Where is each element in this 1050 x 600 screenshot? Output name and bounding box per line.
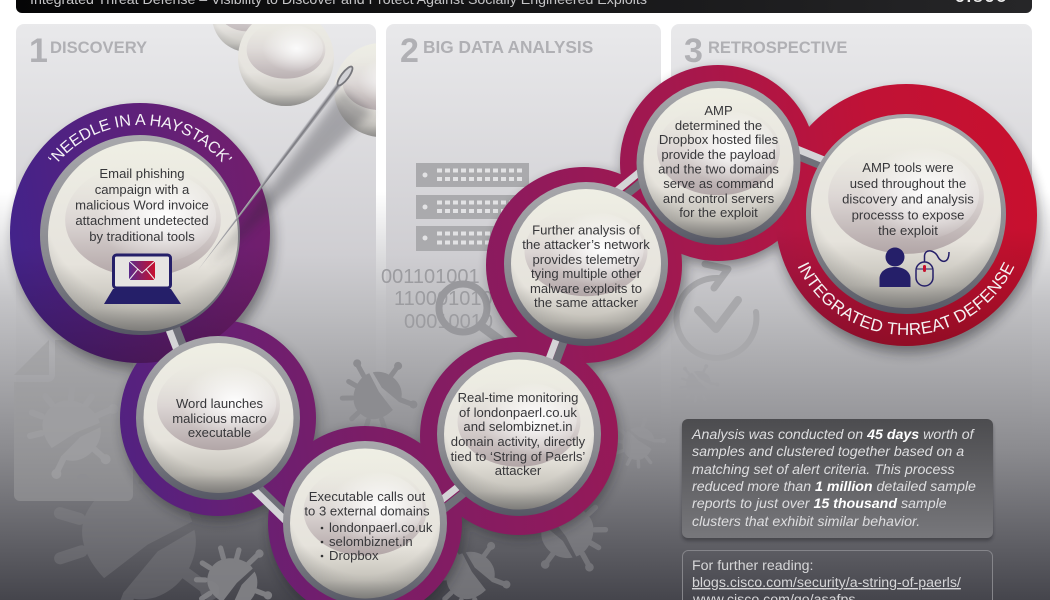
text: processs to expose bbox=[852, 208, 964, 222]
header bar bbox=[16, 0, 1032, 13]
heading: discovery: 1 bbox=[29, 32, 48, 70]
text: attachment undetected bbox=[75, 213, 209, 228]
step 6: amp determined bbox=[636, 81, 800, 245]
heading: retrospective bbox=[684, 32, 847, 70]
text: Executable calls out bbox=[309, 489, 426, 504]
callout text: reduced more than 1 million detailed sample bbox=[692, 479, 976, 495]
text: the same attacker bbox=[534, 295, 639, 310]
icon: document bbox=[14, 340, 133, 501]
icon: needle bbox=[198, 65, 372, 270]
text: Further analysis of bbox=[532, 222, 640, 238]
text: to 3 external domains bbox=[304, 504, 430, 518]
text: tying multiple other bbox=[531, 266, 642, 281]
binary digits: 00010010 bbox=[404, 311, 493, 333]
text: the attacker’s network bbox=[522, 237, 650, 252]
text: and selombiznet.in bbox=[463, 419, 573, 434]
binary digits: 001101001 bbox=[381, 266, 480, 288]
connectors between pearls bbox=[166, 147, 825, 528]
step 1: needle in a haystack bbox=[40, 114, 240, 335]
callout text: clusters that exhibit similar behavior. bbox=[692, 514, 920, 530]
analysis callout bbox=[682, 419, 993, 541]
text: and control servers bbox=[663, 191, 775, 206]
text: domain activity, directly bbox=[451, 434, 586, 449]
text bbox=[658, 103, 779, 220]
text bbox=[451, 390, 586, 478]
icon: laptop with envelope bbox=[104, 255, 181, 304]
text: Email phishing bbox=[99, 166, 185, 181]
heading: discovery bbox=[29, 32, 147, 70]
arc label bbox=[786, 215, 1026, 335]
text: and the two domains bbox=[658, 162, 779, 176]
text bbox=[842, 160, 974, 238]
text: tied to ‘String of Paerls’ bbox=[451, 449, 585, 464]
binary digits bbox=[381, 266, 515, 333]
text: discovery and analysis bbox=[842, 192, 974, 206]
heading: discovery: DISCOVERY bbox=[50, 38, 147, 57]
icon: server rack bbox=[416, 163, 529, 251]
icons: background bugs bbox=[8, 342, 725, 600]
step 7: integrated threat defense: INTEGRATED THREAT DEFENSE bbox=[798, 262, 1014, 335]
panel: retrospective bbox=[671, 24, 1032, 600]
text: AMP tools were bbox=[862, 160, 954, 175]
callout text: matching set of alert criteria. This process bbox=[692, 462, 955, 478]
panel: discovery bbox=[16, 24, 376, 282]
icon: refresh check bbox=[676, 264, 756, 358]
text: attacker bbox=[495, 463, 542, 478]
text: Word launches bbox=[176, 396, 263, 411]
text: provide the payload bbox=[661, 147, 776, 162]
text: by traditional tools bbox=[89, 229, 195, 244]
text: malicious macro bbox=[172, 411, 267, 426]
heading: big data analysis bbox=[400, 32, 593, 70]
text: malicious Word invoice bbox=[75, 198, 209, 212]
text: campaign with a bbox=[95, 182, 190, 197]
binary digits: 11000101010 bbox=[394, 288, 515, 310]
further reading box bbox=[682, 550, 992, 600]
heading: big data analysis: 2 bbox=[400, 32, 419, 70]
icon: person with mouse bbox=[880, 248, 949, 287]
text: AMP bbox=[704, 103, 733, 118]
callout text: Analysis was conducted on 45 days worth of bbox=[691, 427, 976, 443]
step 3: external domains bbox=[283, 441, 447, 600]
decorative pearls bbox=[213, 24, 376, 137]
step 4: real-time monitoring bbox=[437, 352, 601, 516]
callout text bbox=[691, 427, 976, 530]
step 5: further analysis bbox=[504, 182, 668, 346]
callout text: samples and clustered together based on a bbox=[692, 444, 964, 460]
text: Dropbox hosted files bbox=[659, 132, 779, 147]
text: londonpaerl.co.uk bbox=[329, 520, 433, 535]
further reading box: For further reading: bbox=[692, 558, 813, 574]
icon: magnifier bbox=[439, 284, 508, 346]
text: Dropbox bbox=[329, 548, 379, 563]
arc label bbox=[32, 125, 248, 233]
text bbox=[522, 222, 650, 310]
text: provides telemetry bbox=[533, 252, 640, 267]
text: for the exploit bbox=[679, 205, 758, 220]
text: malware exploits to bbox=[530, 281, 642, 296]
heading: retrospective: 3 bbox=[684, 32, 703, 70]
text bbox=[172, 396, 267, 440]
text: selombiznet.in bbox=[329, 534, 413, 549]
further reading box: blogs.cisco.com/security/a-string-of-paerls/ bbox=[692, 575, 961, 591]
step 1: needle in a haystack: ‘NEEDLE IN A HAYSTACK’ bbox=[48, 114, 232, 162]
text: executable bbox=[188, 425, 251, 440]
text: of londonpaerl.co.uk bbox=[459, 405, 577, 420]
step 7: integrated threat defense bbox=[798, 114, 1014, 335]
callout text: reports to just over 15 thousand sample bbox=[692, 496, 947, 512]
text bbox=[304, 489, 433, 563]
panel: big data analysis bbox=[386, 24, 661, 600]
heading: big data analysis: BIG DATA ANALYSIS bbox=[423, 37, 593, 57]
text: used throughout the bbox=[850, 176, 966, 191]
text bbox=[75, 166, 209, 244]
text: serve as command bbox=[663, 176, 774, 191]
text: Real-time monitoring bbox=[458, 390, 578, 405]
text: the exploit bbox=[878, 223, 938, 238]
ring shading bbox=[10, 84, 1037, 363]
step 2: word launches bbox=[136, 336, 300, 500]
text: determined the bbox=[675, 118, 762, 133]
heading: retrospective: RETROSPECTIVE bbox=[708, 39, 847, 57]
